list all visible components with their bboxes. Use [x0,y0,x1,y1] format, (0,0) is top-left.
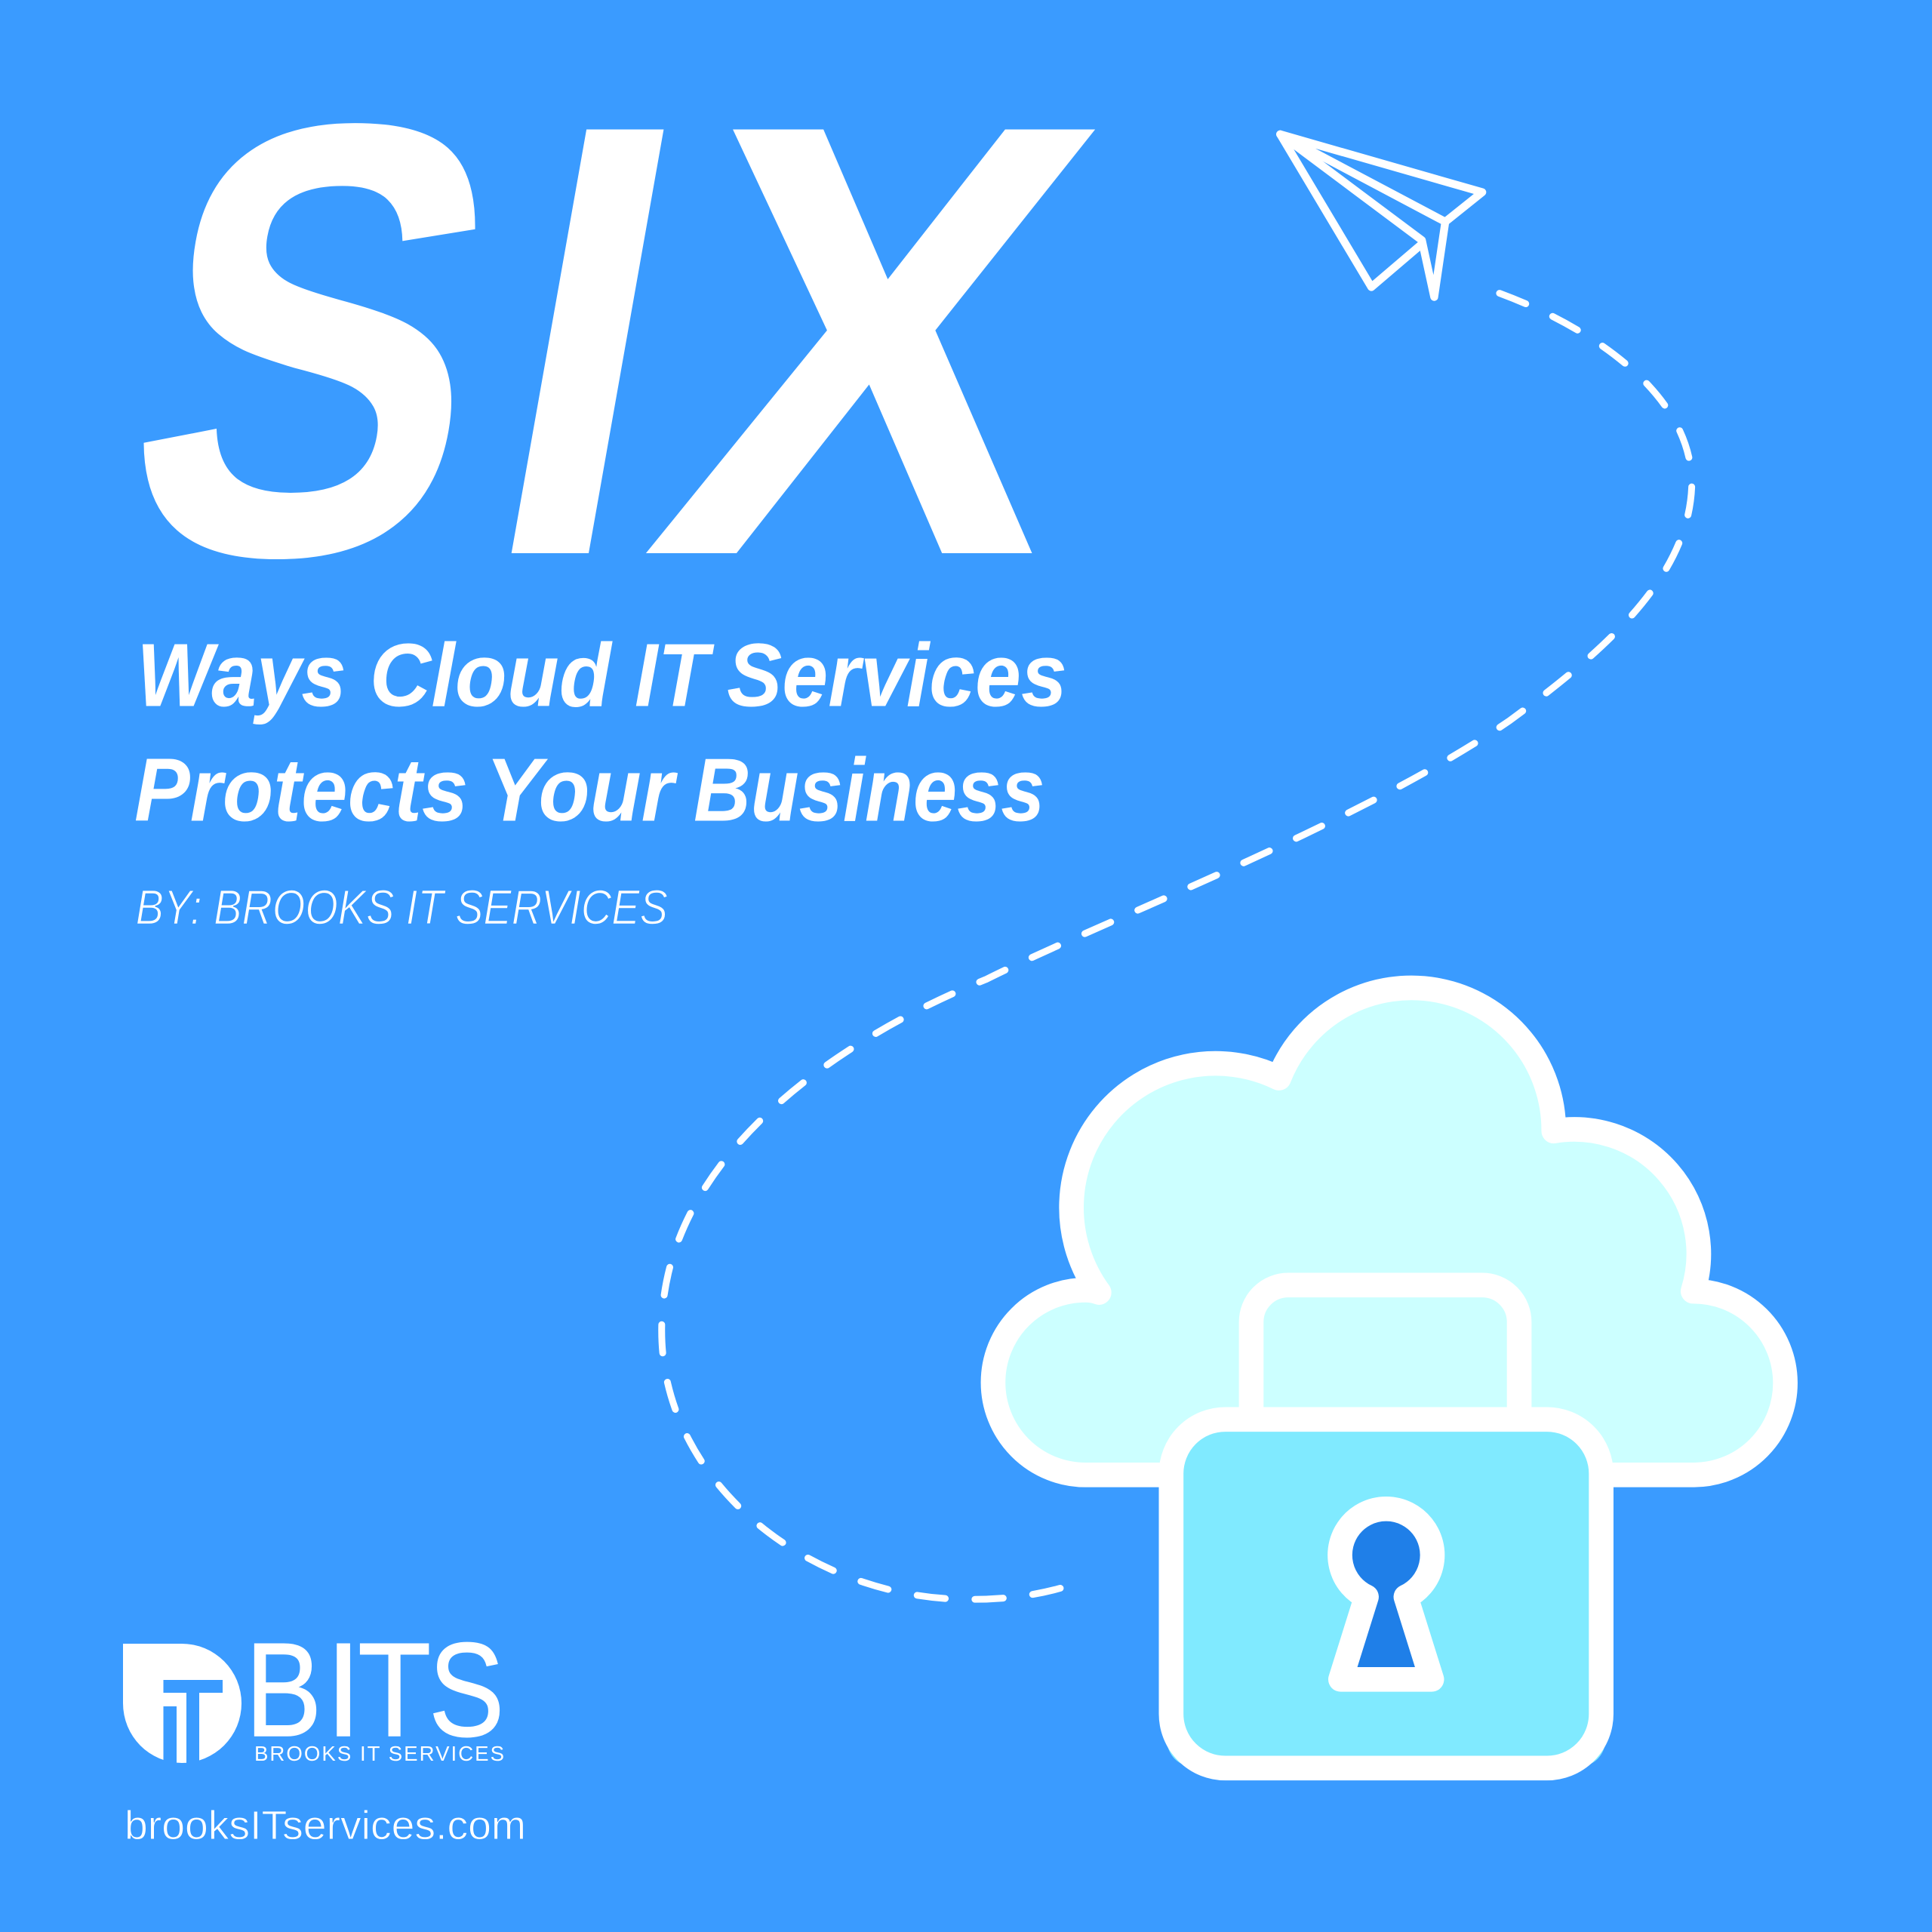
byline: BY: BROOKS IT SERVICES [136,879,668,934]
logo wordmark: S [429,1614,504,1764]
title: SIX: S [87,0,546,684]
subtitle: Your [485,740,678,840]
title: SIX [87,0,1139,685]
logo mark [123,1644,242,1764]
subtitle: Protects [134,740,468,840]
padlock shackle [1251,1285,1519,1429]
subtitle: Cloud [370,626,613,726]
dashed flight path arrow [662,294,1692,1599]
logo wordmark: B [245,1615,322,1764]
subtitle: IT [635,626,715,726]
padlock body [1171,1420,1601,1768]
logo: Brooks IT Services [123,1614,526,1848]
subtitle: Ways [137,626,346,726]
logo wordmark: I [325,1615,361,1764]
icon: cloud with padlock [993,988,1786,1768]
subtitle: Services [727,626,1067,726]
title: SIX: X [617,0,1139,685]
logo tagline: BROOKS IT SERVICES [254,1742,504,1765]
logo wordmark [245,1614,504,1764]
padlock keyhole [1340,1509,1432,1679]
cloud [993,988,1786,1475]
subtitle: Business [694,740,1044,840]
title: SIX: I [453,0,723,685]
website url: brooksITservices.com [125,1803,526,1848]
logo wordmark: T [358,1615,431,1764]
subtitle [134,626,1067,840]
icon: paper plane [1280,134,1482,297]
padlock shadow corners [1167,1423,1605,1767]
